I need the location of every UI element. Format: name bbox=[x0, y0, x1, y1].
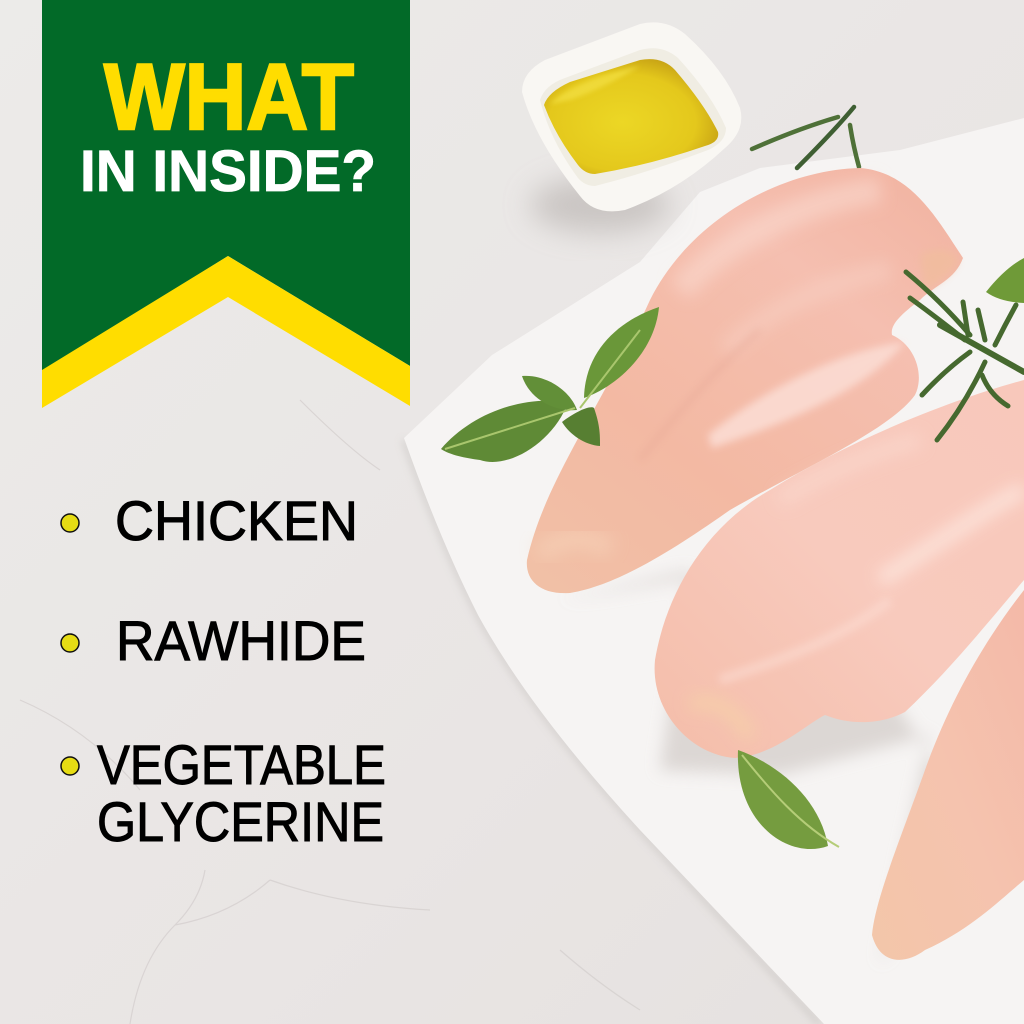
list item: chicken bbox=[61, 489, 358, 552]
ingredient list bbox=[61, 489, 386, 853]
chicken breast: right tip bbox=[872, 590, 1024, 960]
chicken breast: top bbox=[527, 168, 963, 593]
icon: basil leaves left bbox=[441, 307, 659, 462]
banner: green panel bbox=[42, 0, 410, 372]
chicken breast: middle bbox=[655, 380, 1024, 758]
label: CHICKEN bbox=[115, 489, 358, 552]
parchment shadow bbox=[404, 440, 820, 1024]
label: RAWHIDE bbox=[116, 609, 366, 672]
banner bbox=[42, 0, 410, 408]
list item: rawhide bbox=[61, 609, 366, 672]
list item: vegetable glycerine bbox=[61, 733, 386, 853]
bullet bbox=[61, 634, 79, 652]
icon: rosemary sprig right bbox=[906, 272, 1024, 440]
heading: IN INSIDE?: IN INSIDE? bbox=[80, 139, 376, 204]
icon: basil leaf bottom bbox=[738, 750, 839, 849]
banner: yellow chevron bbox=[42, 256, 410, 408]
chicken shadows bbox=[560, 560, 960, 965]
icon: bowl of olive oil bbox=[522, 22, 741, 211]
label: VEGETABLE bbox=[97, 733, 386, 796]
bowl shadow bbox=[530, 177, 670, 233]
heading: WHAT: WHAT bbox=[104, 44, 354, 149]
icon: rosemary sprig top bbox=[752, 107, 859, 168]
parchment paper bbox=[404, 118, 1024, 1024]
photo: ingredients still life bbox=[404, 22, 1024, 1024]
icon: basil leaf top right bbox=[986, 258, 1024, 303]
bullet bbox=[61, 514, 79, 532]
bullet bbox=[61, 757, 79, 775]
label: GLYCERINE bbox=[97, 790, 384, 853]
